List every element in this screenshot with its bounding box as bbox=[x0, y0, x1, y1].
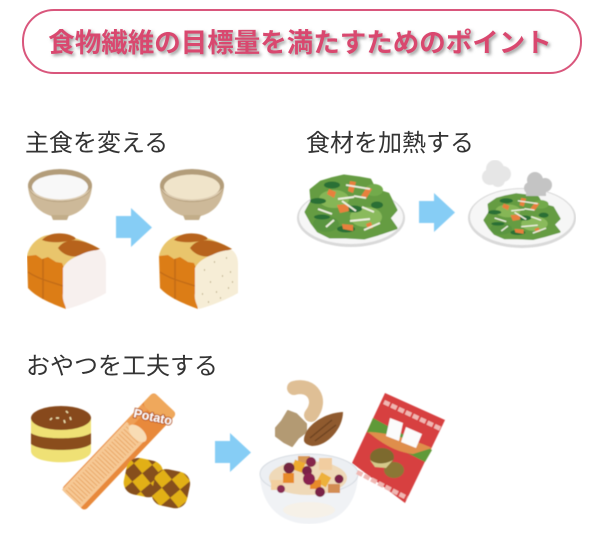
heading: staple food: 主食を変える bbox=[25, 130, 168, 157]
arrow: salad bbox=[419, 193, 455, 232]
icon: cooked salad plate with steam bbox=[468, 160, 576, 248]
title banner bbox=[22, 9, 582, 74]
icon: checkered cookies bbox=[121, 456, 192, 511]
heading: snacks: おやつを工夫する bbox=[26, 353, 218, 380]
icon: chestnut package bbox=[352, 393, 445, 503]
icon: whole grain bread bbox=[159, 233, 238, 309]
arrow: snacks bbox=[215, 433, 251, 472]
icon: cashew, walnut and almond bbox=[276, 387, 343, 446]
icon: white bread bbox=[27, 233, 106, 309]
title: 食物繊維の目標量を満たすためのポイント bbox=[48, 28, 552, 58]
icon: brown rice bowl bbox=[160, 169, 224, 220]
arrow: rice and bread bbox=[116, 208, 152, 247]
icon: dried fruit in glass bowl bbox=[260, 454, 358, 524]
icon: potato chip can: Potato bbox=[132, 406, 174, 428]
icon: raw salad plate bbox=[297, 176, 405, 247]
heading: heat ingredients: 食材を加熱する bbox=[306, 130, 474, 157]
icon: layered cake bbox=[31, 406, 91, 462]
icon: white rice bowl bbox=[28, 169, 92, 220]
icon: potato chip can bbox=[61, 392, 177, 511]
